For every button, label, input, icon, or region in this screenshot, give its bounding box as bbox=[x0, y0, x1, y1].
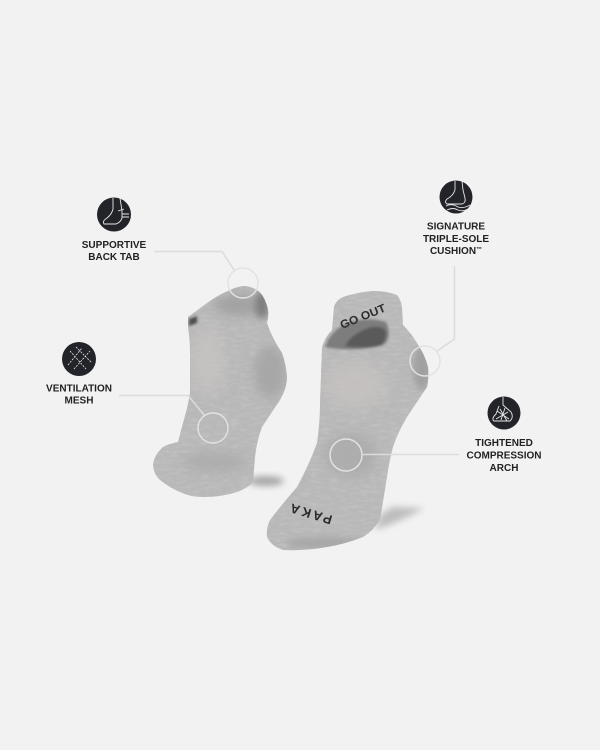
callout: signature triple-sole cushion bbox=[410, 180, 489, 376]
label: VENTILATION bbox=[46, 384, 112, 394]
marker ring bbox=[410, 346, 440, 376]
icon: foot with arch compression bbox=[488, 396, 520, 430]
heather texture bbox=[264, 290, 430, 552]
left sock bbox=[150, 284, 290, 500]
heather texture bbox=[150, 284, 290, 500]
label: TIGHTENED bbox=[475, 438, 533, 449]
inner cuff text: GO OUT bbox=[339, 303, 388, 332]
callout: tightened compression arch bbox=[330, 396, 542, 474]
right sock bbox=[264, 290, 431, 552]
callout: signature triple-sole cushion: TRIPLE-SOLE bbox=[423, 234, 489, 245]
callout: tightened compression arch: COMPRESSION bbox=[466, 450, 542, 462]
left sock opening bbox=[189, 316, 197, 326]
leader line bbox=[437, 266, 454, 351]
icon: foot with back tab bbox=[97, 198, 131, 232]
label: SIGNATURE bbox=[427, 222, 485, 232]
icon: foot on cushion bbox=[440, 180, 472, 214]
marker ring bbox=[330, 439, 362, 471]
leader line bbox=[363, 454, 459, 456]
right sock opening bbox=[325, 319, 389, 349]
leader line bbox=[154, 252, 234, 270]
marker ring bbox=[198, 413, 228, 443]
leader line bbox=[119, 396, 205, 416]
floor shadow: left sock bbox=[248, 476, 284, 486]
marker ring bbox=[228, 268, 258, 298]
callout: supportive back tab: BACK TAB bbox=[88, 252, 140, 263]
floor shadow: right sock bbox=[375, 507, 424, 530]
toe logo text: PAKA bbox=[288, 500, 334, 527]
callout: ventilation mesh bbox=[46, 342, 228, 443]
callout: signature triple-sole cushion: ™ bbox=[476, 246, 482, 253]
label: SUPPORTIVE bbox=[82, 240, 147, 251]
callout: signature triple-sole cushion: CUSHION bbox=[430, 246, 476, 257]
icon: mesh bbox=[62, 342, 96, 376]
callout: supportive back tab bbox=[82, 198, 258, 298]
callout: tightened compression arch: ARCH bbox=[490, 463, 518, 474]
callout: ventilation mesh: MESH bbox=[65, 396, 93, 406]
